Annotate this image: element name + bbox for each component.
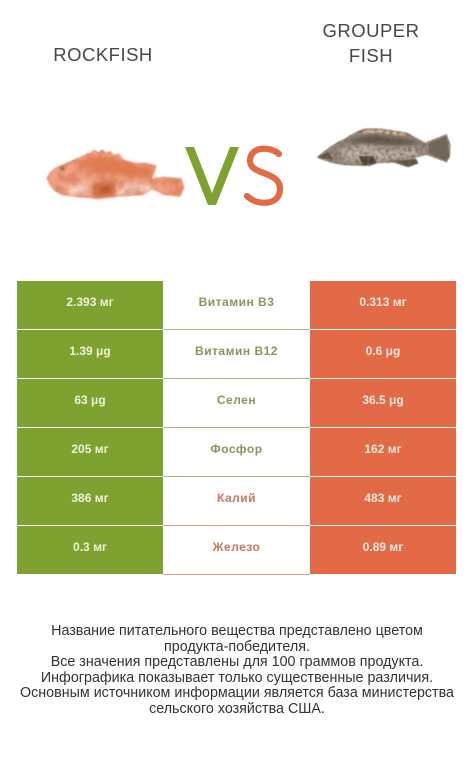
title: rockfish: ROCKFISH (53, 44, 153, 65)
row: selenium: 63 μg (74, 393, 106, 407)
row: phosphorus (17, 428, 163, 476)
row: iron (17, 526, 163, 574)
comparison table: 162 мг (364, 442, 402, 456)
row: selenium (17, 379, 163, 427)
comparison table: Фосфор (210, 442, 263, 456)
footnote text: Все значения представлены для 100 граммов продукта. (51, 654, 423, 670)
row: vitamin B12 (17, 330, 163, 378)
comparison table: 36.5 μg (362, 393, 404, 407)
row: phosphorus: 205 мг (71, 442, 109, 456)
title: grouper fish: FISH (349, 44, 393, 66)
comparison table: Витамин B3 (199, 295, 274, 309)
row: potassium: 386 мг (71, 491, 109, 505)
footnote text (20, 623, 454, 716)
comparison table: Витамин B12 (195, 344, 278, 358)
title: grouper fish: GROUPER (322, 20, 420, 41)
vs: letter S (247, 149, 280, 203)
footnote text: Название питательного вещества представлено цветом (51, 623, 423, 639)
comparison table: Железо (213, 540, 260, 554)
footnote text: сельского хозяйства США. (149, 700, 325, 716)
title: grouper fish (322, 20, 420, 66)
row: vitamin B12: 1.39 μg (69, 344, 111, 358)
comparison table: Селен (217, 393, 256, 407)
comparison table: 0.313 мг (359, 295, 407, 309)
comparison table: 483 мг (364, 491, 402, 505)
comparison table: Калий (217, 491, 256, 505)
footnote text: продукта-победителя. (164, 638, 310, 654)
vs: letter V (185, 146, 284, 206)
row: vitamin B3: 2.393 мг (66, 295, 114, 309)
image: rockfish (46, 148, 186, 201)
row: potassium (17, 477, 163, 525)
footnote text: Инфографика показывает только существенные различия. (41, 670, 433, 686)
comparison table: 0.89 мг (363, 540, 403, 554)
comparison table (17, 281, 456, 575)
row: iron: 0.3 мг (73, 540, 107, 554)
image: grouper fish (316, 128, 452, 168)
comparison table: 0.6 μg (366, 344, 400, 358)
row: vitamin B3 (17, 281, 163, 329)
footnote text: Основным источником информации является база министерства (20, 685, 454, 701)
